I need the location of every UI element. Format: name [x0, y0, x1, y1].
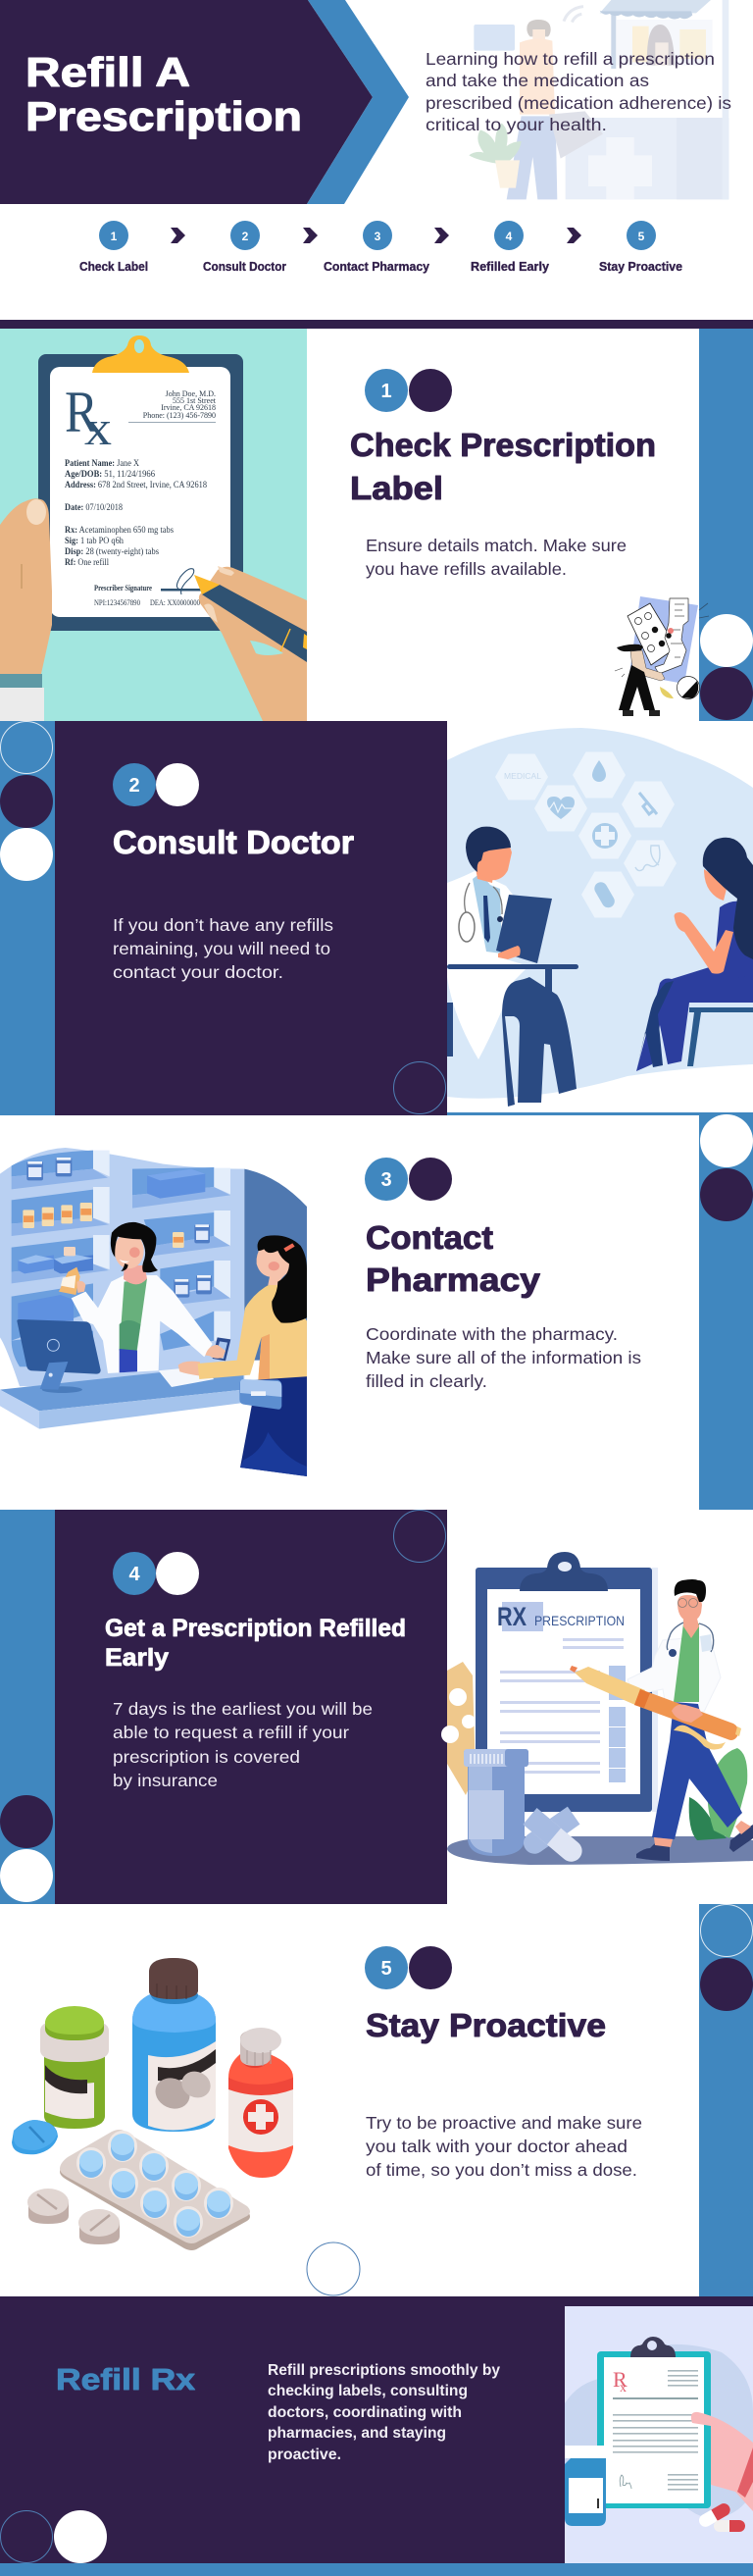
footer panel: [0, 2296, 753, 2576]
badge: number 3: 3: [380, 1169, 392, 1191]
heading: check prescription label: [350, 427, 656, 506]
heading: contact pharmacy: Contact: [366, 1219, 493, 1256]
body: step 4: prescription is covered: [113, 1747, 300, 1767]
badge: number 2: 2: [128, 775, 140, 797]
badge: number 4: [113, 1552, 199, 1595]
panel: step 3: [0, 1112, 753, 1510]
body: step 2: [113, 915, 333, 982]
body: step 2: remaining, you will need to: [113, 939, 330, 958]
body: step 4: by insurance: [113, 1771, 218, 1790]
footer text: proactive.: [268, 2447, 341, 2463]
step navigation: [79, 221, 682, 274]
heading: get a prescription refilled early: Get a Prescription Refilled: [105, 1615, 406, 1642]
footer illustration: clipboard with hand: [565, 2306, 753, 2563]
body: step 4: 7 days is the earliest you will be: [113, 1699, 373, 1719]
illustration: person reading leaflet: [615, 596, 709, 716]
badge: number 2: [113, 763, 199, 806]
top divider bar: [0, 320, 753, 329]
blue rule under illustration: [447, 1112, 699, 1115]
illustration: prescription on clipboard: DEA: XX0000000: [150, 598, 200, 607]
body: step 5: you talk with your doctor ahead: [366, 2137, 628, 2156]
step labels: Consult Doctor: [203, 259, 286, 274]
badge: number 4: 4: [128, 1564, 140, 1585]
decorative circles: right column: [700, 614, 753, 720]
blue column left: [0, 721, 55, 1115]
body: step 4: [113, 1699, 373, 1790]
blue column left: [0, 1510, 55, 1904]
body: step 2: contact your doctor.: [113, 962, 283, 982]
illustration: prescription on clipboard: Age/DOB: 51, 11/24/1966: [65, 470, 155, 480]
outline circle: [394, 1511, 445, 1562]
footer illustration: clipboard with hand: R: [613, 2367, 628, 2392]
illustration: doctor consultation: MEDICAL: [504, 772, 542, 781]
step labels: Refilled Early: [471, 259, 550, 274]
step numbers: 2: [242, 230, 249, 243]
heading: contact pharmacy: [366, 1219, 541, 1298]
step numbers: 5: [638, 230, 645, 243]
body: step 2: If you don’t have any refills: [113, 915, 333, 935]
footer text: [268, 2362, 500, 2463]
bottom blue bar: [0, 2563, 753, 2576]
intro text: and take the medication as: [426, 71, 649, 90]
panel: step 5: [12, 1904, 753, 2296]
body: step 5: Try to be proactive and make sure: [366, 2113, 642, 2133]
decorative circles: left column: [0, 722, 53, 881]
decorative circles: footer: [0, 2510, 107, 2563]
body: step 5: of time, so you don’t miss a dose.: [366, 2160, 637, 2180]
decorative circles: right column: [700, 1114, 753, 1221]
body: step 4: able to request a refill if your: [113, 1723, 349, 1742]
illustration: prescription on clipboard: Rf: One refill: [65, 557, 109, 568]
illustration: prescription on clipboard: Date: 07/10/2018: [65, 503, 123, 513]
body: step 5: [366, 2113, 642, 2180]
badge: number 5: 5: [380, 1958, 392, 1980]
illustration: prescription on clipboard: NPI:1234567890: [94, 598, 140, 607]
right blue column: [699, 1904, 753, 2296]
illustration: prescription on clipboard: R: [65, 380, 98, 444]
header illustration: faded pharmacy: [469, 0, 728, 199]
heading: get a prescription refilled early: [105, 1615, 406, 1672]
illustration: prescription on clipboard: Disp: 28 (twenty-eight) tabs: [65, 546, 159, 557]
step numbers: [111, 230, 645, 243]
intro text: Learning how to refill a prescription: [426, 49, 715, 69]
illustration: doctor with giant prescription: [441, 1552, 753, 1866]
illustration: prescription on clipboard: Rx: Acetaminophen 650 mg tabs: [65, 526, 174, 536]
badge: number 5: [365, 1946, 452, 1989]
right blue column: [699, 329, 753, 721]
step numbers: 4: [506, 230, 513, 243]
heading: get a prescription refilled early: Early: [105, 1644, 169, 1672]
footer text: checking labels, consulting: [268, 2383, 468, 2399]
dark text panel: [55, 1510, 447, 1904]
decorative circles: left column: [0, 1795, 53, 1902]
step labels: [79, 259, 682, 274]
panel: step 1: [0, 329, 753, 721]
body: step 3: Make sure all of the information is: [366, 1348, 641, 1367]
step numbers: 1: [111, 230, 118, 243]
illustration: prescription on clipboard: Prescriber Signature: [94, 584, 152, 592]
dark text panel: [55, 721, 447, 1115]
heading: stay proactive: Stay Proactive: [366, 2007, 606, 2043]
illustration: prescription on clipboard: [0, 329, 307, 721]
illustration: prescription on clipboard: x: [84, 400, 112, 455]
body: step 1: [366, 536, 627, 579]
title: Refill A: [25, 49, 190, 95]
title: [25, 49, 302, 139]
heading: consult doctor: Consult Doctor: [113, 824, 354, 860]
outline circle: [394, 1061, 445, 1114]
heading: check prescription label: Label: [350, 470, 443, 506]
heading: contact pharmacy: Pharmacy: [366, 1262, 541, 1298]
badge: number 3: [365, 1158, 452, 1201]
panel: step 2: [0, 721, 753, 1115]
intro text: critical to your health.: [426, 115, 607, 134]
illustration: prescription on clipboard: Phone: (123) 456-7890: [143, 411, 216, 420]
step labels: Check Label: [79, 259, 148, 274]
illustration: doctor with giant prescription: RX: [497, 1602, 527, 1631]
footer title: Refill Rx: [56, 2362, 196, 2396]
step labels: Stay Proactive: [599, 259, 682, 274]
illustration: prescription on clipboard: Irvine, CA 92618: [161, 403, 216, 412]
step numbers: 3: [375, 230, 381, 243]
footer text: Refill prescriptions smoothly by: [268, 2362, 500, 2379]
illustration: medicine bottles and pills: [12, 1958, 293, 2250]
badge: number 1: 1: [380, 381, 392, 402]
heading: check prescription label: Check Prescription: [350, 427, 656, 463]
body: step 3: [366, 1324, 641, 1391]
illustration: pharmacist and customer: [0, 1148, 307, 1476]
intro text: prescribed (medication adherence) is: [426, 93, 731, 113]
title: Prescription: [25, 93, 302, 139]
right blue column: [699, 1112, 753, 1510]
illustration: doctor consultation: [447, 728, 753, 1107]
footer illustration: clipboard with hand: x: [620, 2381, 627, 2396]
step labels: Contact Pharmacy: [324, 259, 430, 274]
footer text: pharmacies, and staying: [268, 2425, 446, 2442]
badge: number 1: [365, 369, 452, 412]
illustration: prescription on clipboard: John Doe, M.D.: [166, 389, 216, 398]
body: step 3: filled in clearly.: [366, 1371, 487, 1391]
illustration: doctor with giant prescription: PRESCRIPTION: [534, 1613, 625, 1628]
illustration: prescription on clipboard: Address: 678 2nd Street, Irvine, CA 92618: [65, 481, 207, 490]
illustration: prescription on clipboard: Patient Name: Jane X: [65, 459, 139, 469]
step arrows: [171, 228, 581, 243]
outline circle: [307, 2242, 360, 2295]
footer text: doctors, coordinating with: [268, 2404, 462, 2421]
body: step 3: Coordinate with the pharmacy.: [366, 1324, 618, 1344]
body: step 1: Ensure details match. Make sure: [366, 536, 627, 555]
illustration: prescription on clipboard: 555 1st Street: [173, 396, 217, 405]
intro text: [426, 49, 731, 134]
panel: step 4: [0, 1510, 753, 1904]
step circles: [99, 221, 656, 250]
header banner: blue chevron: [307, 0, 409, 204]
header banner: dark arrow: [0, 0, 373, 204]
illustration: prescription on clipboard: Sig: 1 tab PO q6h: [65, 537, 124, 546]
decorative circles: right column: [700, 1905, 753, 2011]
body: step 1: you have refills available.: [366, 559, 567, 579]
